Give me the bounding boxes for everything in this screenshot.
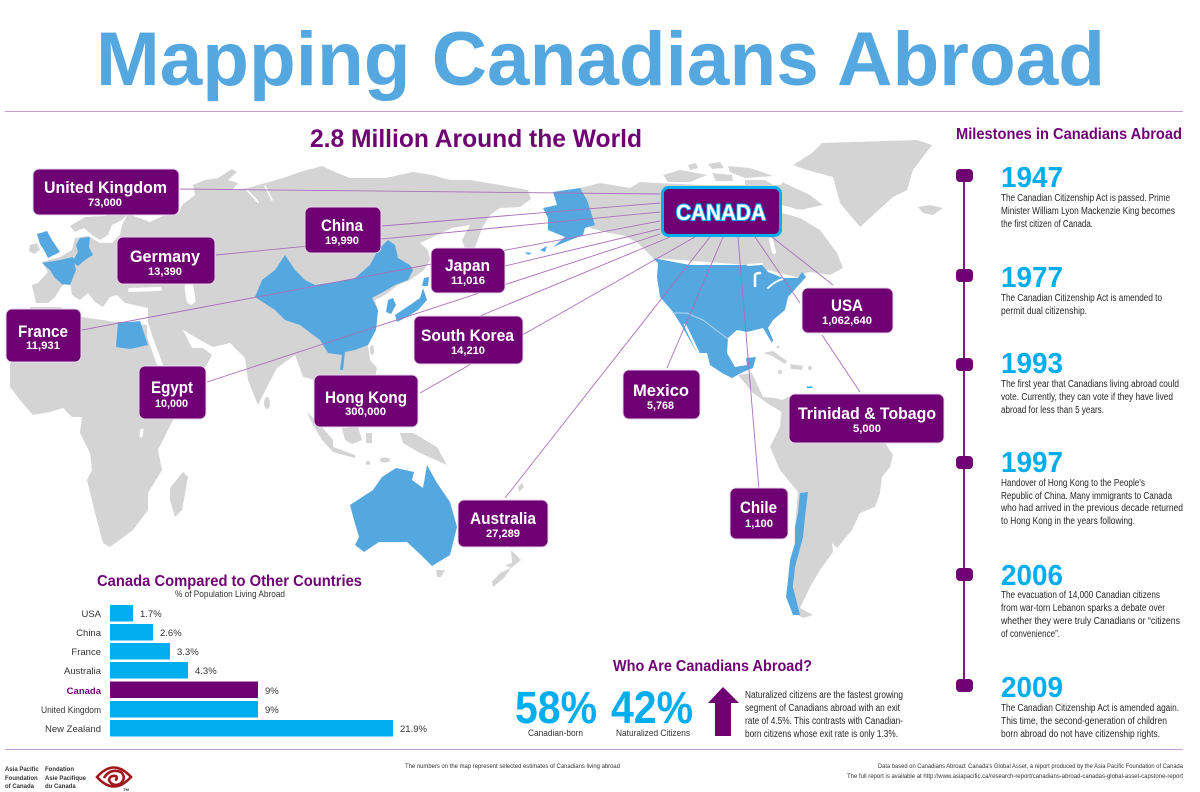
footer note: data source: Data based on Canadians Abroad: Canada's Global Asset, a report produced by the Asia Pacific Foundation of Canada — [878, 764, 1184, 770]
highlighted country: Chile — [786, 492, 808, 615]
label: Trinidad and Tobago: Trinidad & Tobago — [798, 404, 936, 423]
label: Hong Kong: 300,000 — [345, 406, 386, 418]
timeline axis — [963, 176, 965, 685]
milestone: 2009: born abroad do not have citizenship rights. — [1001, 729, 1160, 740]
footer: foundation name: Foundation — [5, 776, 38, 782]
milestone: 1977 — [956, 262, 1162, 317]
label: USA: USA — [831, 296, 863, 315]
label: Australia: Australia — [470, 509, 536, 528]
stat: 58 percent: Canadian-born — [528, 728, 583, 739]
footer: foundation name — [5, 767, 87, 790]
land: Baffin and Arctic islands — [663, 162, 823, 210]
milestone: 2009: 2009 — [1001, 672, 1063, 704]
great lakes and gulf of California — [685, 264, 783, 352]
label: Egypt: Egypt — [151, 378, 193, 397]
bar: France — [71, 643, 199, 660]
land: Eurasia — [32, 166, 531, 410]
label: Trinidad and Tobago — [789, 394, 944, 443]
label: Egypt — [139, 366, 206, 419]
label: South Korea: South Korea — [421, 326, 515, 345]
label: Hong Kong — [314, 375, 418, 427]
highlighted country: Australia — [350, 465, 457, 566]
land: North America — [580, 182, 843, 278]
footer: foundation name: Asia Pacific — [5, 767, 39, 773]
water details — [130, 186, 815, 436]
panel: who are Canadians abroad — [515, 658, 903, 740]
label: Chile: 1,100 — [745, 518, 773, 530]
USA Mexico border — [672, 313, 728, 339]
text block: exit rate: rate of 4.5%. This contrasts with Canadian- — [745, 716, 903, 727]
bar: United Kingdom — [41, 701, 279, 718]
label: South Korea — [414, 316, 523, 364]
label: Canada: CANADA — [676, 200, 766, 225]
label: Germany: 13,390 — [148, 266, 182, 278]
footer: foundation name: Asie Pacifique — [45, 776, 87, 782]
milestone: 1977: permit dual citizenship. — [1001, 306, 1087, 317]
bar: France: France — [71, 647, 101, 658]
highlighted country: Trinidad — [807, 386, 812, 388]
stat: 42 percent: 42% — [611, 682, 693, 733]
footer: foundation name: of Canada — [5, 784, 35, 790]
milestone: 2006 — [956, 560, 1180, 640]
bar: Canada — [67, 682, 279, 698]
footer: foundation name: Fondation — [45, 767, 74, 773]
bar: China: China — [76, 628, 102, 639]
label: Australia — [458, 500, 548, 547]
map heading: 2.8 Million Around the World — [310, 125, 642, 153]
label: Australia: 27,289 — [486, 528, 520, 540]
footer note: data source: The full report is available at http://www.asiapacific.ca/research-report/canadians-abroad-canadas-global-asset-capstone-report — [847, 774, 1183, 780]
land: Scandinavia — [70, 212, 130, 240]
milestone: 2006: 2006 — [1001, 560, 1063, 592]
label: United Kingdom: United Kingdom — [44, 178, 167, 197]
milestone: 1997: Handover of Hong Kong to the People's — [1001, 478, 1145, 489]
highlighted country: China — [255, 240, 413, 370]
highlighted countries: USA and Mexico — [653, 258, 806, 378]
section heading: Who Are Canadians Abroad? — [613, 658, 812, 675]
text block: exit rate: Naturalized citizens are the fastest growing — [745, 690, 903, 701]
stat: 42 percent: Naturalized Citizens — [616, 728, 690, 739]
milestone: 1947 — [956, 162, 1175, 230]
label: United Kingdom: 73,000 — [88, 197, 122, 209]
highlighted country: South Korea — [386, 298, 396, 314]
panel: milestones timeline — [956, 126, 1183, 740]
bar: Canada: 9% — [265, 686, 279, 697]
label: Japan — [431, 248, 505, 293]
milestone: 1947: the first citizen of Canada. — [1001, 219, 1093, 230]
bar: United Kingdom: United Kingdom — [41, 705, 101, 716]
bar: USA: 1.7% — [140, 609, 162, 620]
land: South America — [770, 400, 893, 618]
label: South Korea: 14,210 — [451, 345, 485, 357]
label: Mexico: 5,768 — [647, 400, 674, 412]
title: Mapping Canadians Abroad — [96, 17, 1105, 102]
milestone: 2006: The evacuation of 14,000 Canadian citizens — [1001, 590, 1160, 601]
label: Trinidad and Tobago: 5,000 — [853, 423, 881, 435]
label: France: France — [18, 322, 68, 341]
milestone: 2006: whether they were truly Canadians or “citizens — [1000, 616, 1180, 627]
land: Asian and Pacific islands — [264, 345, 524, 492]
text block: exit rate: born citizens whose exit rate is only 1.3%. — [745, 729, 898, 740]
label: France: 11,931 — [26, 340, 60, 352]
label: Mexico: Mexico — [633, 381, 689, 400]
footer note: data source — [847, 764, 1184, 780]
land: Tasmania and New Zealand — [436, 550, 521, 587]
panel: bar chart comparison — [41, 573, 427, 736]
milestone: 2006: of convenience”. — [1001, 629, 1060, 640]
land: Central America — [738, 373, 800, 412]
bar: New Zealand — [45, 720, 427, 736]
label: Japan: Japan — [445, 256, 490, 275]
milestone: 1997 — [956, 447, 1183, 527]
milestone: 2009 — [956, 672, 1179, 740]
stat: 58 percent: 58% — [515, 682, 597, 733]
icon: foundation logo — [97, 768, 131, 792]
land: Africa — [10, 307, 205, 547]
highlighted country: Egypt — [116, 321, 148, 349]
milestones heading: Milestones in Canadians Abroad — [956, 126, 1182, 143]
bar: Australia: Australia — [64, 666, 102, 677]
milestone: 1977: The Canadian Citizenship Act is amended to — [1001, 293, 1162, 304]
bar: Australia — [64, 662, 217, 678]
land: Caribbean islands — [763, 346, 812, 374]
icon: foundation logo: TM — [123, 787, 129, 792]
label: Canada — [662, 188, 780, 236]
milestone: 2009: This time, the second-generation of children — [1001, 716, 1167, 727]
label: Mexico — [623, 370, 700, 419]
milestone: 1993 — [956, 348, 1179, 416]
land: Ireland — [29, 243, 40, 254]
milestone: 1997: to Hong Kong in the years following. — [1001, 516, 1135, 527]
milestone: 1947: 1947 — [1001, 162, 1063, 194]
milestone: 1977: 1977 — [1001, 262, 1063, 294]
label: Egypt: 10,000 — [155, 398, 188, 410]
bar: Australia: 4.3% — [195, 666, 217, 677]
bar: USA — [81, 605, 162, 622]
milestone: 1993: abroad for less than 5 years. — [1001, 405, 1104, 416]
label: Chile: Chile — [740, 498, 777, 517]
label: France — [6, 309, 81, 362]
bar: USA: USA — [81, 609, 102, 620]
label: China: 19,990 — [325, 235, 359, 247]
bar: New Zealand: New Zealand — [45, 724, 101, 735]
milestone: 1993: 1993 — [1001, 348, 1063, 380]
label: Japan: 11,016 — [451, 275, 485, 287]
world map — [10, 140, 943, 618]
label: Chile — [730, 488, 788, 539]
land: Iceland — [918, 205, 943, 215]
footer: foundation name: du Canada — [45, 784, 76, 790]
chart subtitle: % of Population Living Abroad — [175, 589, 285, 600]
label: Hong Kong: Hong Kong — [325, 388, 407, 407]
label: United Kingdom — [33, 169, 179, 215]
connector lines from Canada — [82, 189, 860, 498]
bar: United Kingdom: 9% — [265, 705, 279, 716]
highlighted country: United Kingdom — [37, 231, 60, 258]
land: Madagascar — [170, 472, 188, 517]
label: Germany: Germany — [130, 247, 201, 266]
icon: up arrow — [708, 687, 739, 736]
footer note: map numbers: The numbers on the map represent selected estimates of Canadians living abroad — [405, 764, 620, 770]
bar: Canada: Canada — [67, 686, 102, 697]
land: Greenland — [793, 140, 932, 227]
bar: China: 2.6% — [160, 628, 182, 639]
milestone: 2006: from war-torn Lebanon sparks a debate over — [1001, 603, 1166, 614]
highlighted country: Japan — [395, 277, 429, 322]
label: China — [305, 207, 381, 253]
highlighted country: France — [42, 257, 76, 285]
chart heading: Canada Compared to Other Countries — [97, 573, 362, 590]
text block: exit rate — [745, 690, 903, 740]
label: USA: 1,062,640 — [822, 315, 872, 327]
highlighted country: Alaska — [525, 188, 595, 255]
milestone: 1997: 1997 — [1001, 447, 1063, 479]
label: China: China — [321, 216, 363, 235]
bar: New Zealand: 21.9% — [400, 724, 427, 735]
label: USA — [802, 288, 893, 333]
bar: France: 3.3% — [177, 647, 199, 658]
text block: exit rate: segment of Canadians abroad with an exit — [745, 703, 900, 714]
label: Germany — [117, 237, 215, 284]
highlighted country: Germany — [72, 237, 93, 266]
bar: China — [76, 624, 182, 640]
